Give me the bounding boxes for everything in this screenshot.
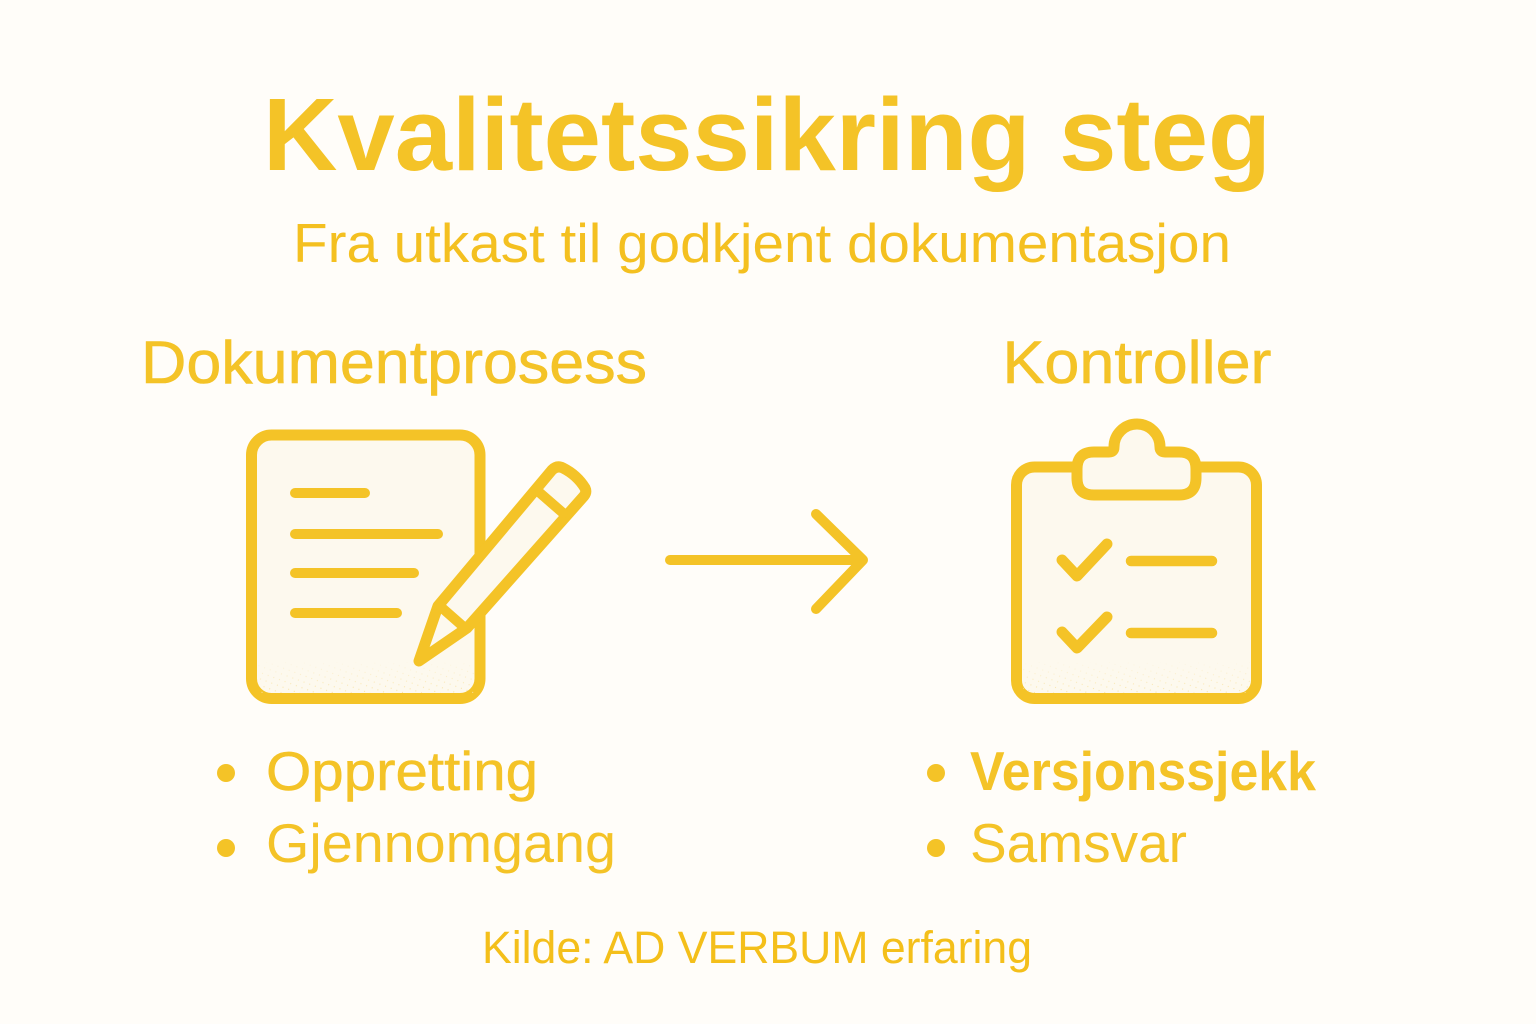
list: Kontroller items	[927, 740, 1316, 874]
list: Kontroller items: Versjonssjekk	[970, 740, 1316, 802]
icon: clipboard checklist	[1016, 424, 1256, 698]
list: Dokumentprosess items	[217, 740, 616, 874]
icon: document with pencil	[252, 435, 586, 698]
list: Kontroller items: Samsvar	[970, 812, 1187, 874]
heading: Kontroller: Kontroller	[1002, 329, 1272, 396]
list: Dokumentprosess items: Oppretting	[266, 740, 538, 802]
arrow	[670, 514, 863, 609]
source note: Kilde: AD VERBUM erfaring	[482, 922, 1032, 973]
subtitle: Fra utkast til godkjent dokumentasjon	[293, 212, 1231, 274]
heading: Dokumentprosess: Dokumentprosess	[141, 329, 647, 396]
list: Dokumentprosess items: Gjennomgang	[266, 812, 616, 874]
title: Kvalitetssikring steg	[263, 77, 1271, 192]
